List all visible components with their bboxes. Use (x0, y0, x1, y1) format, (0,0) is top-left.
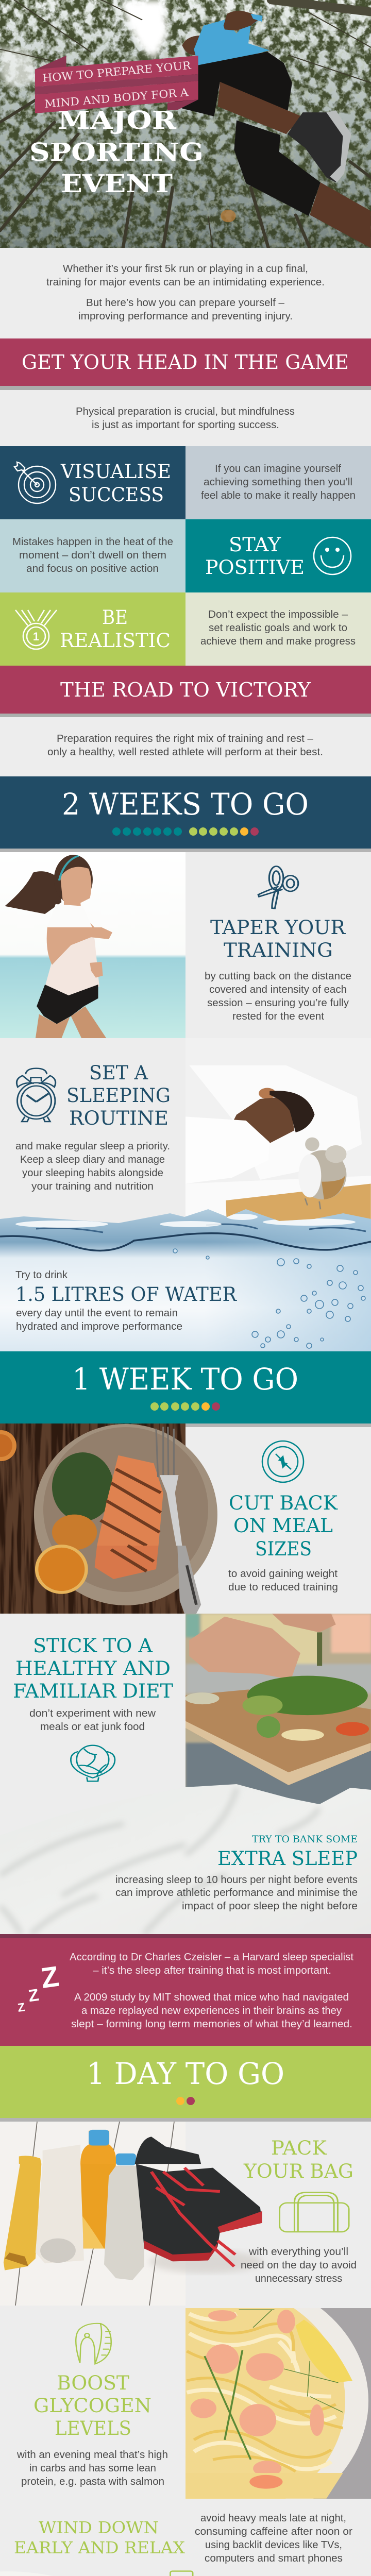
panel: mistakes explanation: moment – don’t dwell on them (19, 550, 166, 561)
panel: stick to a healthy diet: STICK TO A (33, 1635, 153, 1657)
ribbon banner (35, 56, 198, 113)
panel: boost glycogen levels: in carbs and has some lean (29, 2463, 156, 2474)
heading band: the road to victory: THE ROAD TO VICTORY (60, 679, 311, 701)
panel: pack your bag: YOUR BAG (243, 2160, 353, 2182)
title: major sporting event: SPORTING (29, 138, 204, 167)
icon: zzz (16, 1960, 61, 2014)
title: major sporting event: MAJOR (58, 106, 177, 135)
panel: visualise explanation (185, 446, 371, 519)
panel: mistakes explanation: and focus on positive action (26, 563, 159, 574)
panel: extra sleep on white bed sheet: EXTRA SLEEP (217, 1848, 358, 1870)
callout: sleep after training: slept – forming long term memories of what they’d learned. (71, 2019, 352, 2030)
panel: stick to a healthy diet: FAMILIAR DIET (13, 1680, 173, 1702)
mindfulness text: Physical preparation is crucial, but mindfulness (76, 406, 295, 417)
panel: wind down early and relax: EARLY AND RELAX (14, 2539, 185, 2557)
panel: cut back on meal sizes: SIZES (255, 1538, 312, 1560)
photo: white sheet (0, 1784, 371, 1934)
panel: taper your training: by cutting back on the distance (205, 971, 351, 982)
panel: pack your bag: PACK (271, 2137, 327, 2159)
panel: boost glycogen levels: with an evening meal that’s high (16, 2449, 168, 2461)
panel: stay positive (185, 519, 371, 592)
photo: open book (0, 2571, 371, 2576)
panel: taper your training (205, 866, 351, 1022)
intro text: Whether it’s your first 5k run or playing in a cup final, (63, 263, 308, 275)
icon: crossed-out phone (170, 2571, 193, 2576)
panel: visualise explanation: achieving something then you’ll (204, 477, 352, 488)
photo: grilled salmon on a plate (0, 1423, 217, 1614)
panel: visualise explanation: If you can imagine yourself (215, 463, 341, 474)
road to victory text: only a healthy, well rested athlete will perform at their best. (47, 747, 323, 758)
intro text: But here’s how you can prepare yourself – (86, 297, 285, 309)
photo: water splash (0, 1206, 371, 1351)
title: major sporting event: EVENT (61, 170, 173, 198)
panel: realistic explanation: set realistic goals and work to (209, 622, 347, 634)
panel: pack your bag (241, 2137, 357, 2284)
panel: realistic explanation: achieve them and make progress (200, 636, 356, 647)
photo: runner leaping among trees (0, 0, 371, 248)
panel: realistic explanation (185, 592, 371, 666)
panel: wind down early and relax: avoid heavy meals late at night, (200, 2513, 346, 2524)
icon: alarm clock (16, 1069, 56, 1122)
callout: sleep after training: A 2009 study by MIT showed that mice who had navigated (74, 1992, 349, 2003)
ribbon banner: MIND AND BODY FOR A (44, 86, 189, 110)
panel: wind down early and relax: WIND DOWN (39, 2519, 159, 2537)
panel: wind down early and relax: consuming caffeine after noon or (195, 2526, 352, 2537)
countdown dots (112, 827, 259, 836)
heading band: get your head in the game: GET YOUR HEAD IN THE GAME (22, 351, 349, 374)
panel: cut back on meal sizes: CUT BACK (229, 1492, 338, 1514)
panel: extra sleep on white bed sheet (0, 1784, 371, 1934)
road to victory text: Preparation requires the right mix of training and rest – (57, 733, 314, 744)
icon: salmon steak (76, 2324, 111, 2364)
panel: boost glycogen levels: BOOST (57, 2372, 129, 2394)
panel: drink water: Try to drink (15, 1269, 68, 1281)
panel: taper your training: covered and intensity of each (209, 984, 347, 995)
panel: boost glycogen levels: protein, e.g. pasta with salmon (21, 2476, 164, 2487)
panel: wind down early and relax: using backlit devices like TVs, (205, 2539, 342, 2551)
photo: woman running by the sea (0, 852, 185, 1038)
panel: wind down early and relax (14, 2513, 352, 2564)
title: major sporting event (29, 106, 204, 198)
callout: sleep after training: – it’s the sleep after training that is most important. (93, 1965, 331, 1976)
hero panel (0, 0, 371, 248)
panel: pack your bag: unnecessary stress (255, 2273, 342, 2284)
panel: set a sleeping routine: and make regular sleep a priority. (15, 1141, 170, 1152)
intro text: improving performance and preventing injury. (78, 311, 293, 322)
panel: set a sleeping routine: ROUTINE (69, 1107, 168, 1129)
icon: sports bag (280, 2192, 349, 2232)
icon: medal: 1 (33, 630, 39, 643)
intro text (46, 263, 325, 322)
panel: visualise success (0, 446, 185, 519)
countdown dots (176, 2097, 195, 2105)
icon: zzz: Z (39, 1960, 61, 1994)
panel: visualise explanation: feel able to make it really happen (201, 490, 356, 501)
ribbon banner: HOW TO PREPARE YOUR (42, 59, 192, 84)
panel: mistakes explanation: Mistakes happen in the heat of the (12, 536, 173, 548)
panel: taper your training: session – ensuring you’re fully (207, 997, 349, 1009)
timeline band: 1 day to go: 1 DAY TO GO (87, 2056, 284, 2091)
photo: man sleeping beside alarm clock (185, 1065, 371, 1221)
panel: taper your training: TRAINING (224, 939, 333, 961)
panel: taper your training: TAPER YOUR (210, 917, 346, 939)
panel: stay positive: STAY (229, 534, 281, 556)
road to victory text (47, 733, 323, 758)
panel: cut back on meal sizes: to avoid gaining weight (228, 1568, 338, 1580)
panel: stick to a healthy diet: don’t experiment with new (29, 1708, 156, 1719)
photo: salmon pasta (185, 2308, 371, 2499)
timeline band: 1 week to go (0, 1351, 371, 1427)
timeline band: 1 day to go (0, 2046, 371, 2122)
panel: cut back on meal sizes: ON MEAL (233, 1515, 333, 1537)
panel: drink water: 1.5 LITRES OF WATER (15, 1283, 237, 1306)
timeline band: 2 weeks to go: 2 WEEKS TO GO (62, 787, 309, 822)
panel: drink water: hydrated and improve performance (16, 1321, 182, 1332)
panel: stay positive: POSITIVE (205, 556, 305, 579)
photo: chopping vegetables (185, 1614, 371, 1804)
icon: zzz: Z (16, 2000, 26, 2014)
callout: sleep after training: According to Dr Charles Czeisler – a Harvard sleep specialist (70, 1952, 353, 1963)
panel: set a sleeping routine: your training and nutrition (31, 1181, 154, 1192)
heading band: get your head in the game (0, 338, 371, 390)
icon: zzz: Z (27, 1985, 40, 2005)
panel: set a sleeping routine (15, 1062, 171, 1192)
panel: be realistic: BE (102, 606, 128, 629)
panel: boost glycogen levels: LEVELS (55, 2417, 131, 2439)
panel: wind down early and relax: computers and smart phones (205, 2553, 343, 2564)
panel: stick to a healthy diet (13, 1635, 173, 1781)
panel: realistic explanation: Don’t expect the impossible – (208, 609, 348, 620)
panel: set a sleeping routine: your sleeping habits alongside (22, 1167, 163, 1179)
heading band: the road to victory (0, 666, 371, 717)
panel: stick to a healthy diet: meals or eat junk food (40, 1721, 145, 1733)
panel: taper your training: rested for the event (232, 1011, 324, 1022)
panel: set a sleeping routine: SET A (89, 1062, 148, 1084)
panel: be realistic (0, 592, 185, 666)
panel: visualise success: VISUALISE (60, 461, 171, 483)
countdown dots (150, 1402, 220, 1411)
panel: extra sleep on white bed sheet: can improve athletic performance and minimise the (115, 1887, 358, 1899)
panel: stick to a healthy diet: HEALTHY AND (15, 1657, 171, 1680)
icon: medal (15, 610, 57, 649)
callout: sleep after training (0, 1934, 371, 2046)
panel: extra sleep on white bed sheet: TRY TO BANK SOME (252, 1834, 358, 1845)
icon: shrinking plate (262, 1441, 303, 1482)
icon: smiley face (314, 537, 351, 574)
panel: visualise success: SUCCESS (69, 484, 164, 506)
mindfulness text (76, 406, 295, 431)
panel: set a sleeping routine: SLEEPING (66, 1084, 171, 1107)
panel: drink water: every day until the event to remain (16, 1308, 178, 1319)
panel: drink water (0, 1206, 371, 1351)
callout: sleep after training: a maze replayed new experiences in their brains as they (81, 2005, 342, 2016)
panel: extra sleep on white bed sheet: impact of poor sleep the night before (182, 1901, 358, 1912)
mindfulness text: is just as important for sporting success. (92, 419, 279, 431)
icon: target with arrow (14, 462, 56, 503)
panel: pack your bag: with everything you’ll (248, 2246, 348, 2258)
panel: cut back on meal sizes: due to reduced training (228, 1582, 338, 1593)
panel: boost glycogen levels: GLYCOGEN (33, 2395, 151, 2417)
panel: pack your bag: need on the day to avoid (241, 2260, 357, 2271)
icon: scissors (258, 866, 298, 908)
timeline band: 2 weeks to go (0, 776, 371, 852)
panel: be realistic: REALISTIC (60, 630, 171, 652)
panel: extra sleep on white bed sheet: increasing sleep to 10 hours per night before events (115, 1874, 358, 1886)
runner figure (156, 11, 371, 248)
photo: towels, bottles and trainers (0, 2122, 263, 2306)
panel: set a sleeping routine: Keep a sleep diary and manage (20, 1154, 165, 1165)
panel: boost glycogen levels (16, 2324, 168, 2487)
icon: cabbage (71, 1745, 115, 1781)
timeline band: 1 week to go: 1 WEEK TO GO (72, 1362, 298, 1397)
panel: cut back on meal sizes (228, 1441, 338, 1593)
intro text: training for major events can be an intimidating experience. (46, 277, 325, 288)
panel: mistakes explanation (0, 519, 185, 592)
